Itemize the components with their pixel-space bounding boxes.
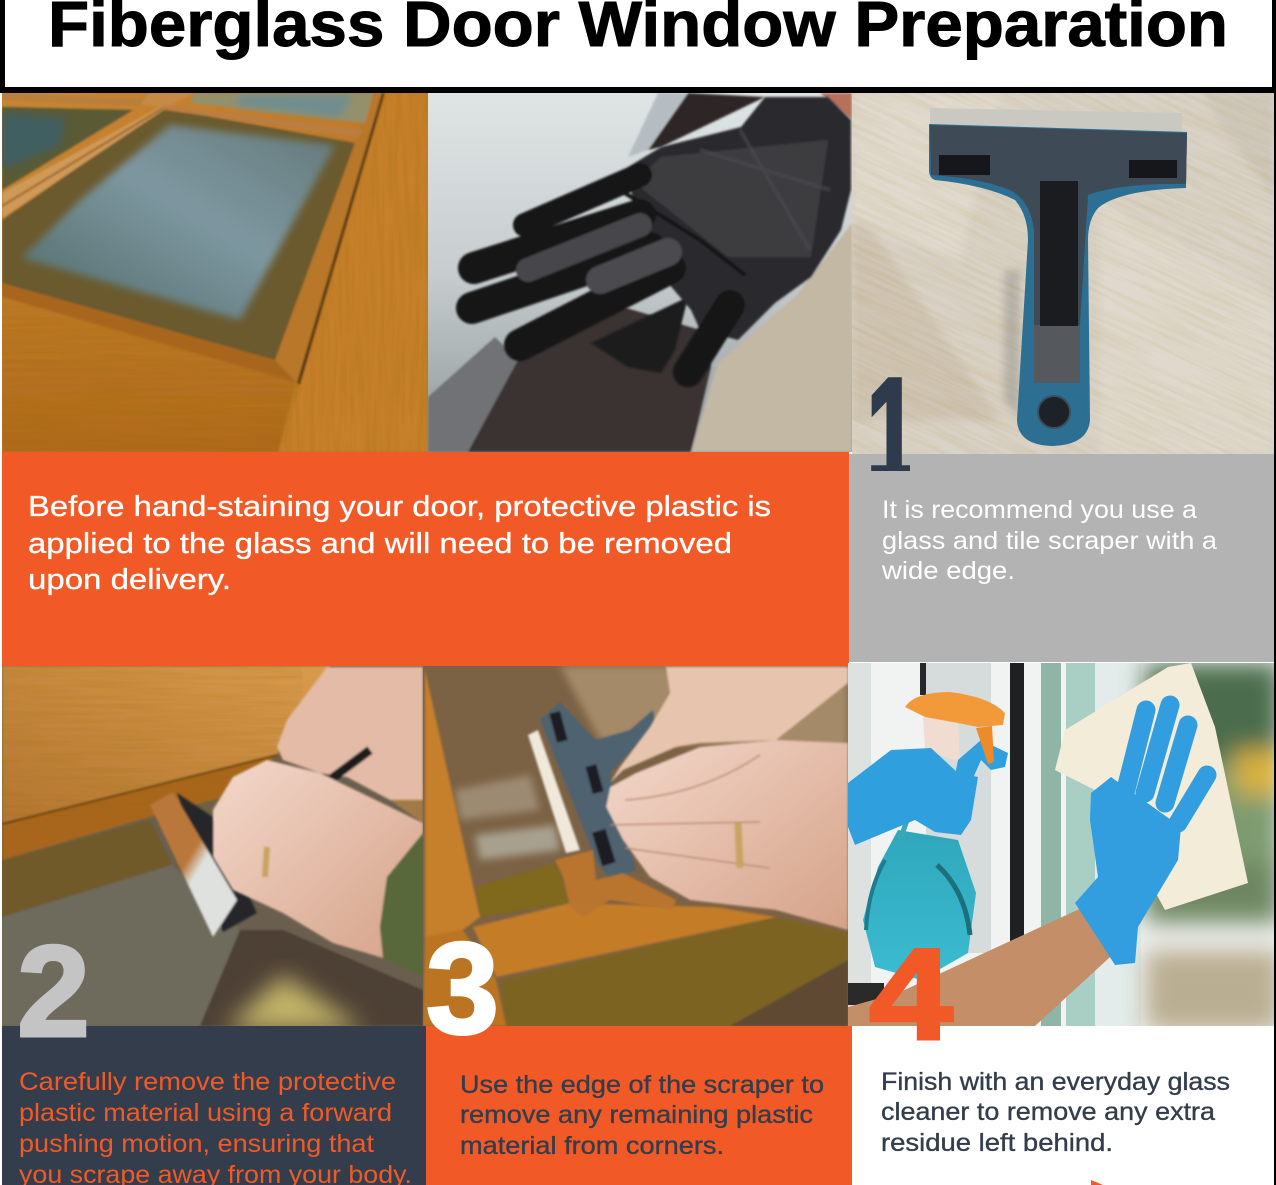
scraper body [929, 124, 1187, 446]
photo: wooden door with glass panes [2, 93, 428, 452]
step 2 text lines: Carefully remove the protective [19, 1068, 396, 1096]
photo: cleaning the window with spray [848, 663, 1276, 1031]
step 3 text lines: Use the edge of the scraper to [460, 1071, 824, 1099]
panel: intro text [2, 452, 849, 666]
cleaning cloth [1055, 663, 1248, 910]
step number 2: 2 [17, 918, 90, 1064]
arm [848, 905, 1121, 1026]
photo: scraping corners [423, 666, 848, 1026]
photo: black gloved hand [428, 93, 852, 452]
step 1 text lines: It is recommend you use a [882, 496, 1197, 524]
photo: glass and tile scraper [852, 93, 1274, 454]
scraper [528, 702, 656, 880]
header banner [5, 0, 1272, 87]
step 2 text lines: plastic material using a forward [19, 1099, 392, 1127]
bottle [863, 822, 976, 979]
scraper [150, 792, 257, 937]
step 3 text lines: remove any remaining plastic [460, 1101, 813, 1129]
glove [472, 97, 851, 373]
plastic curl [555, 850, 676, 917]
right gloved hand [1075, 705, 1207, 965]
panel: step 3 text [426, 1026, 852, 1185]
intro text lines: Before hand-staining your door, protective plastic is [28, 491, 771, 523]
intro text lines: upon delivery. [28, 564, 231, 596]
step 4 text lines: residue left behind. [881, 1129, 1113, 1157]
step number 1: 1 [867, 347, 917, 515]
step number 4: 4 [869, 921, 953, 1067]
panel: step 2 text [2, 1026, 426, 1185]
arrow tip [1091, 1180, 1103, 1185]
step 2 text lines: pushing motion, ensuring that [19, 1130, 374, 1158]
photo: scraping plastic with forward motion [2, 666, 423, 1030]
step 1 text lines: glass and tile scraper with a [882, 527, 1217, 555]
step 4 text lines: cleaner to remove any extra [881, 1098, 1215, 1126]
step 3 text lines: material from corners. [460, 1132, 724, 1160]
glove fingers [472, 175, 730, 372]
panel: step 4 text [852, 1026, 1274, 1185]
step number 3: 3 [426, 915, 499, 1061]
wood grain [283, 387, 299, 441]
step 4 text lines: Finish with an everyday glass [881, 1068, 1230, 1096]
step 1 text lines: wide edge. [881, 557, 1015, 585]
hands [606, 667, 848, 930]
intro text lines: applied to the glass and will need to be removed [28, 528, 732, 560]
spray head [905, 692, 1005, 762]
panel: step 1 text [849, 454, 1274, 662]
left gloved hand [848, 726, 1008, 845]
hands [213, 667, 423, 977]
scraper blade [930, 108, 1182, 132]
